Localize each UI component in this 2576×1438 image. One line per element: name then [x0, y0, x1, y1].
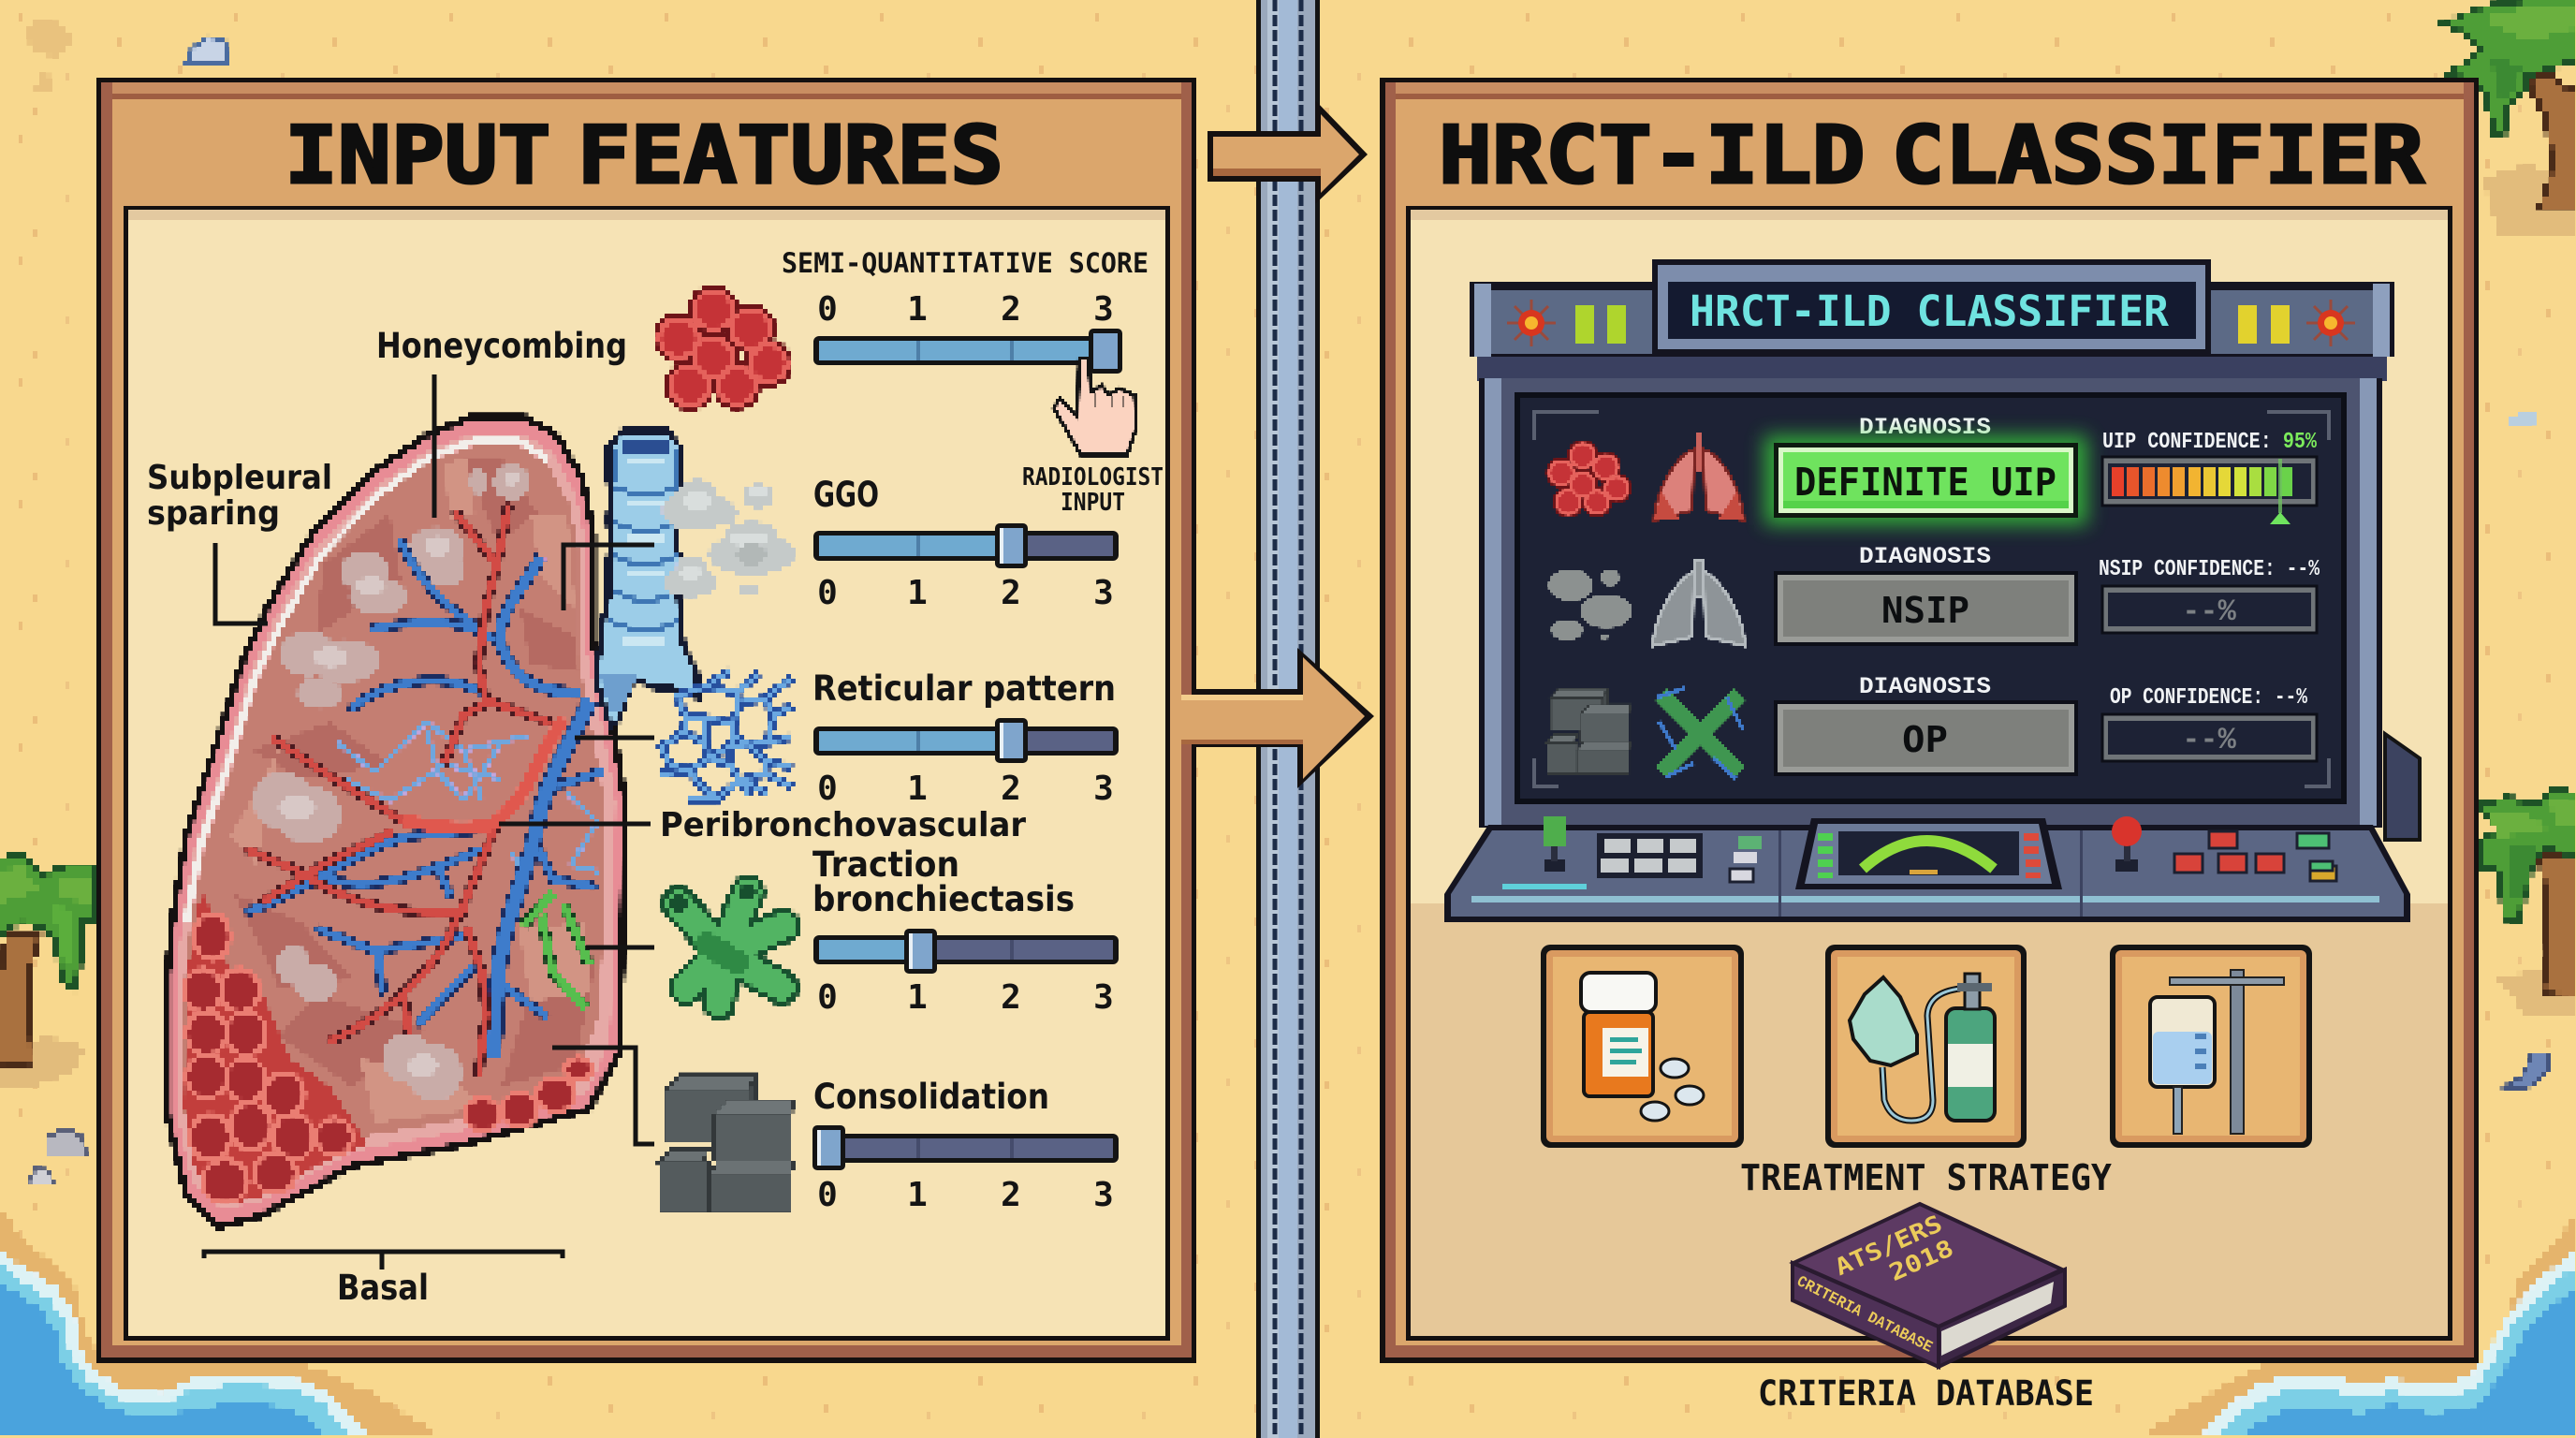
cover year: 2018 — [1885, 1234, 1957, 1286]
slider: reticular score 2: 0 — [817, 770, 838, 808]
panel body — [1406, 206, 2452, 1341]
slider: reticular score 2: 1 — [907, 770, 928, 808]
button: OP — [1902, 719, 1948, 760]
screen icons — [1545, 433, 1745, 779]
panel frame — [96, 78, 1196, 1363]
honeycombing region — [184, 893, 592, 1205]
right joystick — [2112, 816, 2142, 872]
green and yellow buttons — [2297, 833, 2336, 881]
slider: ggo score 2: 3 — [1093, 574, 1114, 612]
label: radiologist input: INPUT — [1061, 489, 1125, 517]
label: traction bronchiectasis: bronchiectasis — [812, 879, 1075, 919]
slider: traction bronchiectasis score 1: 0 — [817, 978, 838, 1017]
classifier machine — [1444, 259, 2420, 922]
status lights right — [2238, 300, 2355, 346]
label: radiologist input: RADIOLOGIST — [1022, 463, 1164, 492]
lung pleural outline — [168, 418, 624, 1226]
left joystick — [1544, 816, 1566, 872]
icon: grey lungs — [1653, 560, 1745, 646]
icon: red lungs — [1654, 433, 1744, 521]
side box — [2385, 734, 2420, 840]
row 3 diagnosis: OP — [1774, 673, 2317, 776]
tube — [1882, 989, 1960, 1121]
palm shadows — [0, 165, 2576, 1086]
red vascular tree — [249, 506, 564, 1073]
slider: honeycombing score 3: 2 — [1001, 290, 1021, 329]
slider: ggo score 2: 2 — [1001, 574, 1021, 612]
slider: ggo score 2 — [813, 523, 1119, 612]
confidence meter — [2102, 457, 2317, 524]
beach pebbles — [28, 37, 2549, 1184]
label: DIAGNOSIS — [1859, 673, 1991, 700]
slider: traction bronchiectasis score 1 — [813, 929, 1119, 1017]
trachea — [595, 431, 697, 726]
slider: traction bronchiectasis score 1: 3 — [1093, 978, 1114, 1017]
left panel pixel art — [168, 285, 795, 1226]
ground-glass patches — [253, 463, 531, 1101]
icon: ground-glass clouds — [662, 479, 795, 597]
slider: consolidation score 0: 2 — [1001, 1176, 1021, 1214]
label: criteria database: CRITERIA DATABASE — [1758, 1373, 2094, 1414]
panel: HRCT-ILD classifier — [1380, 78, 2479, 1363]
icon: honeycomb small — [1545, 440, 1632, 518]
confidence label: OP CONFIDENCE: --% — [2110, 685, 2307, 711]
label: honeycombing: Honeycombing — [376, 326, 627, 366]
confidence meter: --% — [2182, 594, 2237, 629]
panel body — [124, 206, 1170, 1341]
blue bronchial tree — [249, 543, 601, 1058]
bottle — [1581, 973, 1656, 1096]
sand patches — [26, 17, 73, 91]
slider: ggo score 2: 0 — [817, 574, 838, 612]
tank — [1946, 974, 1995, 1121]
slider: reticular score 2: 2 — [1001, 770, 1021, 808]
cabinet body — [1479, 378, 2382, 828]
button — [1774, 700, 2078, 776]
criteria book — [1793, 1204, 2065, 1367]
glow — [1764, 435, 2087, 525]
label: DIAGNOSIS — [1859, 543, 1991, 570]
panel heading: INPUT FEATURES — [285, 110, 1003, 202]
dark screen — [1515, 392, 2347, 804]
confidence label: NSIP CONFIDENCE: --% — [2099, 557, 2320, 582]
label: DIAGNOSIS — [1859, 414, 1991, 441]
treatment card: pill bottle — [1541, 945, 1744, 1148]
panel frame — [1380, 78, 2479, 1363]
pole — [2170, 970, 2284, 1134]
label: radiologist input — [1022, 463, 1164, 517]
slider: consolidation score 0: 1 — [907, 1176, 928, 1214]
bag — [2150, 997, 2215, 1134]
slider: consolidation score 0 — [812, 1125, 1119, 1214]
small switches — [1730, 836, 1762, 882]
label: traction bronchiectasis: Traction — [812, 844, 959, 885]
slider knob — [904, 929, 937, 974]
slider knob — [812, 1125, 845, 1170]
label: treatment strategy: TREATMENT STRATEGY — [1740, 1157, 2112, 1198]
icon: grey blocks — [1547, 689, 1631, 773]
label: semi-quantitative score: SEMI-QUANTITATIVE SCORE — [782, 247, 1149, 279]
slider: honeycombing score 3: 3 — [1093, 290, 1114, 329]
confidence meter: --% — [2182, 723, 2237, 757]
label: peribronchovascular: Peribronchovascular — [660, 806, 1026, 844]
label: reticular pattern: Reticular pattern — [812, 668, 1116, 709]
feature labels — [147, 247, 1164, 1308]
row 1 diagnosis: definite UIP — [1764, 414, 2317, 525]
panel: input features — [96, 78, 1196, 1363]
confidence label: UIP CONFIDENCE: 95% — [2102, 430, 2317, 455]
cover text: ATS/ERS — [1831, 1210, 1946, 1281]
marquee title: HRCT-ILD CLASSIFIER — [1690, 286, 2170, 336]
traction bronchiectasis branch — [523, 893, 590, 1008]
panel heading: HRCT-ILD CLASSIFIER — [1439, 110, 2425, 202]
slider: honeycombing score 3 — [813, 290, 1122, 374]
status lights left — [1507, 300, 1626, 346]
marquee — [1652, 259, 2211, 355]
label: subpleural sparing — [147, 459, 332, 533]
slider: consolidation score 0: 3 — [1093, 1176, 1114, 1214]
slider: ggo score 2: 1 — [907, 574, 928, 612]
spine text: CRITERIA DATABASE — [1793, 1273, 1935, 1357]
icon: honeycomb cluster — [653, 285, 793, 411]
slider knob — [1089, 329, 1122, 374]
treatment card: oxygen mask and tank — [1825, 945, 2027, 1148]
label: subpleural sparing: Subpleural — [147, 459, 332, 497]
icon: grey clouds — [1548, 569, 1632, 640]
button — [1774, 443, 2078, 518]
row 2 diagnosis: NSIP — [1774, 543, 2320, 646]
slider: reticular score 2 — [813, 718, 1119, 808]
confidence meter — [2102, 714, 2317, 761]
confidence meter — [2102, 586, 2317, 633]
button: NSIP — [1881, 590, 1969, 631]
leader lines — [204, 374, 654, 1269]
reticular mesh vessels — [338, 722, 601, 915]
top bar — [1470, 282, 2394, 381]
icon: traction bronchiectasis — [670, 884, 783, 1003]
label: subpleural sparing: sparing — [147, 494, 280, 533]
lung illustration — [168, 418, 624, 1226]
label: basal: Basal — [337, 1268, 429, 1308]
label: ggo: GGO — [813, 475, 879, 515]
slider: honeycombing score 3: 1 — [907, 290, 928, 329]
mask — [1850, 977, 1917, 1065]
icon: consolidation blocks — [660, 1076, 794, 1211]
white pleural gap — [186, 441, 549, 922]
central gauge — [1795, 818, 2062, 889]
slider: traction bronchiectasis score 1: 1 — [907, 978, 928, 1017]
label: traction bronchiectasis — [812, 844, 1075, 919]
icon: fibrosis cross — [1657, 688, 1743, 779]
palm trunks — [0, 73, 2576, 1067]
red buttons — [2174, 831, 2284, 873]
arrow: top connector — [1208, 100, 1368, 204]
bottom-left shoreline — [0, 1208, 444, 1438]
parenchyma shading — [234, 457, 597, 1087]
slider: consolidation score 0: 0 — [817, 1176, 838, 1214]
keypad — [1597, 833, 1703, 878]
slider: reticular score 2: 3 — [1093, 770, 1114, 808]
central divider road — [1256, 0, 1320, 1438]
icon: reticular net — [662, 671, 793, 799]
slider: traction bronchiectasis score 1: 2 — [1001, 978, 1021, 1017]
slider: honeycombing score 3: 0 — [817, 290, 838, 329]
lung parenchyma — [184, 446, 605, 1198]
treatment card: IV drip — [2110, 945, 2312, 1148]
pills — [1641, 1059, 1704, 1121]
icon: radiologist hand cursor — [1054, 358, 1136, 455]
label: consolidation: Consolidation — [813, 1077, 1049, 1117]
palm fronds — [0, 0, 2576, 990]
slider knob — [995, 523, 1028, 568]
slider knob — [995, 718, 1028, 763]
button — [1774, 571, 2078, 646]
arrow: lower connector — [1170, 648, 1374, 788]
bottom-right shoreline — [2139, 1217, 2576, 1438]
control console — [1444, 816, 2410, 922]
button: DEFINITE UIP — [1794, 460, 2056, 505]
